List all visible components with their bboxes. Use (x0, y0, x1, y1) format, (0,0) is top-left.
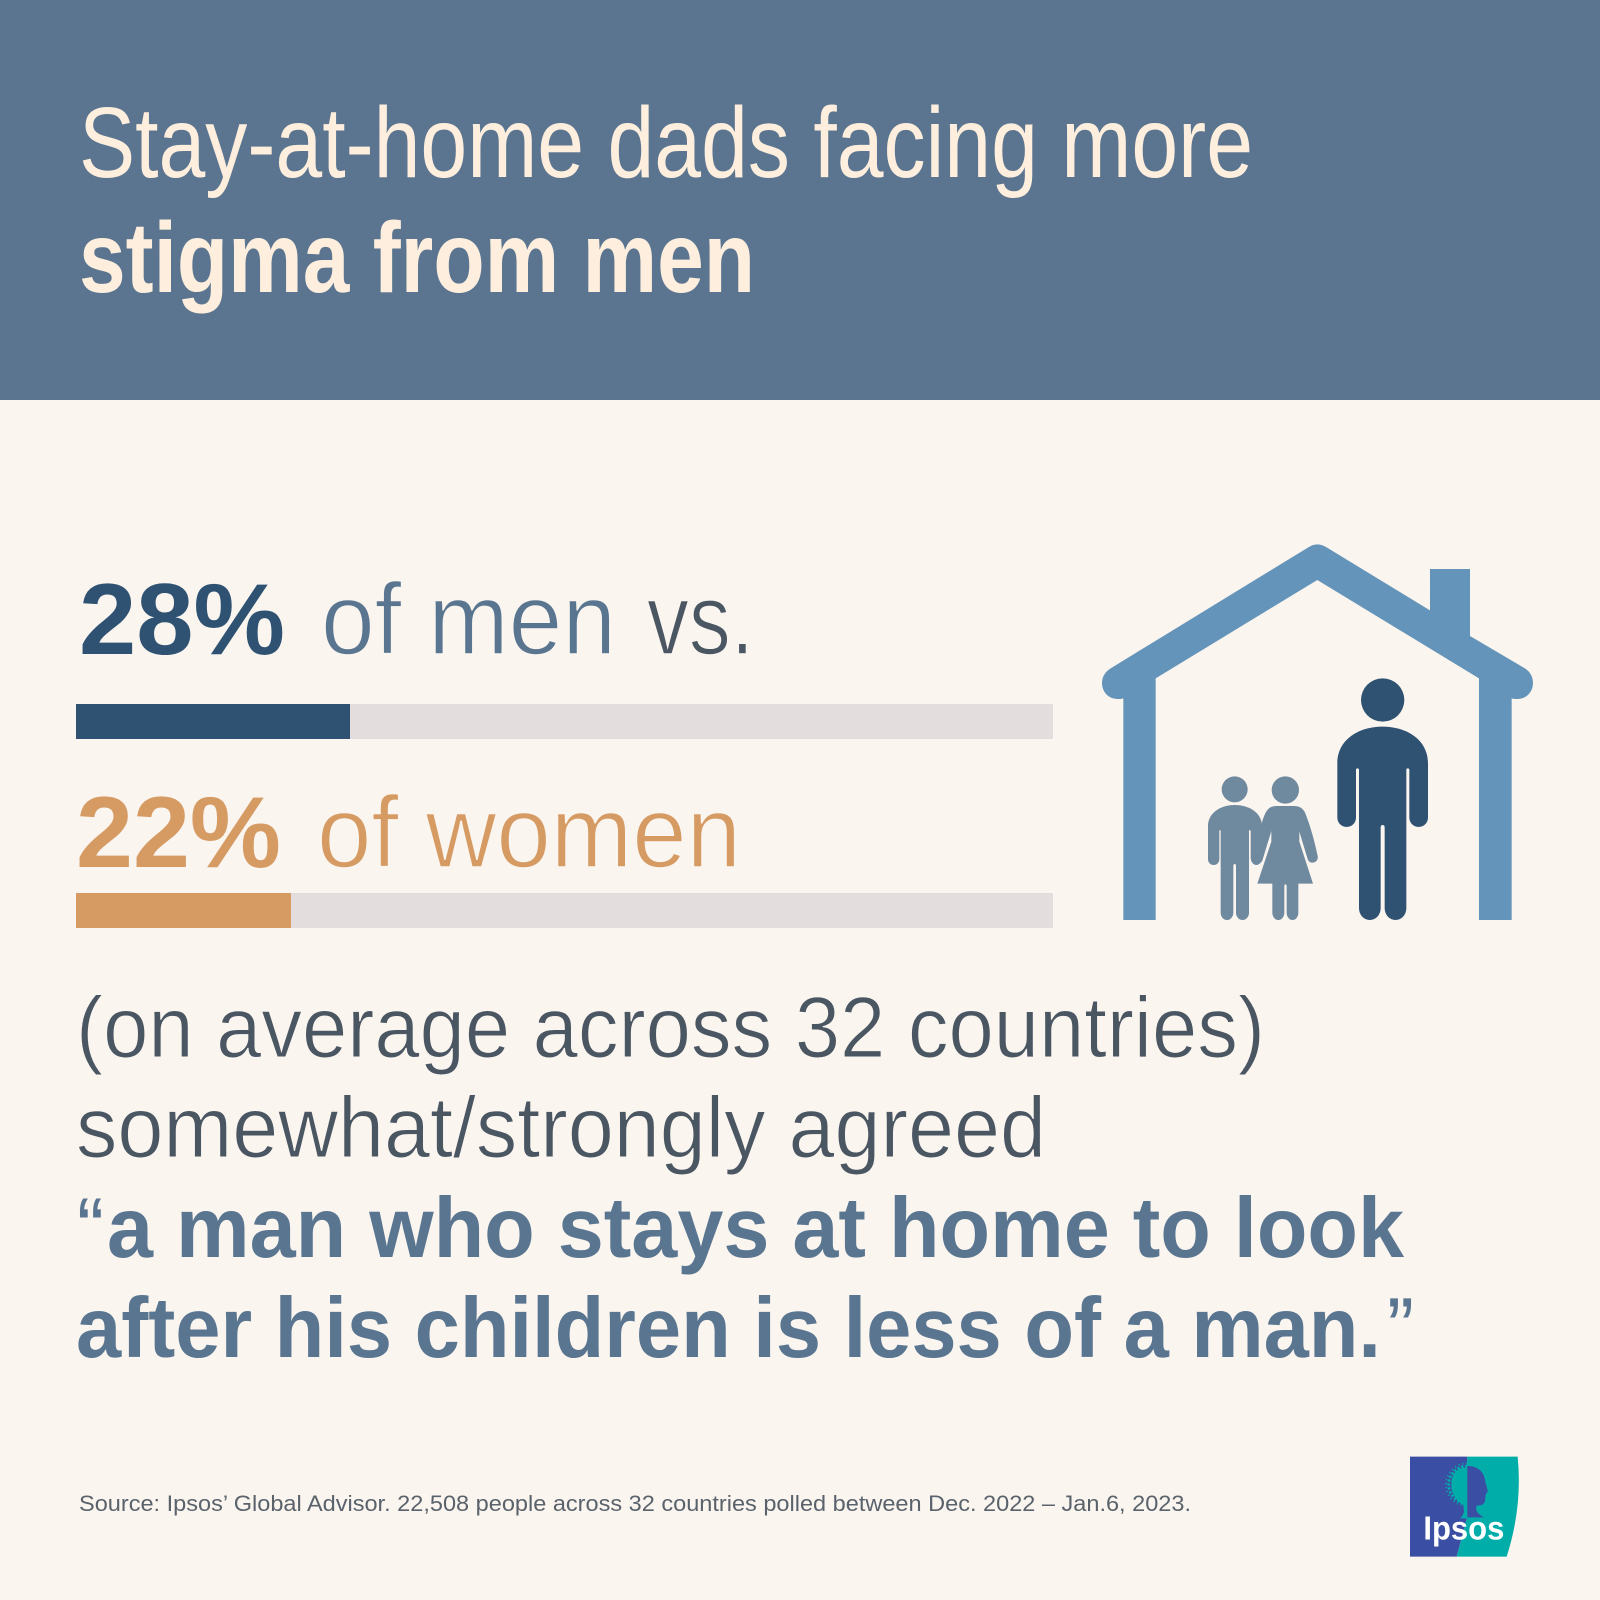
icon: house (1102, 544, 1533, 920)
quote: “ (77, 1181, 104, 1276)
quote: a man who stays at home to look (107, 1181, 1405, 1276)
text: survey description: (on average across 32 countries) (76, 980, 1265, 1076)
icon: boy (1208, 776, 1262, 920)
statistic: 28% of men: vs. (647, 564, 754, 676)
icon: house with family (1102, 544, 1533, 920)
statistic: 28% of men: of men (321, 564, 616, 676)
quote: ” (1387, 1281, 1414, 1376)
header banner (0, 0, 1600, 400)
statistic: 22% of women (76, 777, 741, 889)
statistic: 28% of men (79, 564, 754, 676)
logo: Ipsos: Ipsos (1423, 1511, 1504, 1548)
quote: after his children is less of a man. (76, 1281, 1381, 1376)
statistic: 28% of men: 28% (79, 564, 285, 676)
icon: girl (1253, 776, 1318, 920)
statistic: 22% of women: 22% (76, 777, 281, 889)
statistic: 22% of women: of women (317, 777, 741, 889)
text: survey description (76, 980, 1265, 1176)
text: survey description: somewhat/strongly agreed (76, 1080, 1046, 1176)
bar: women 22% (76, 893, 1053, 928)
quote (76, 1181, 1414, 1376)
icon: father (1337, 678, 1428, 920)
logo: Ipsos (1410, 1457, 1519, 1557)
title: stigma from men (79, 202, 755, 314)
title: Stay-at-home dads facing more (79, 87, 1253, 199)
title (79, 87, 1253, 314)
source note: Source: Ipsos’ Global Advisor. 22,508 people across 32 countries polled between Dec. 2022 – Jan.6, 2023. (79, 1491, 1191, 1516)
bar: men 28% (76, 704, 1053, 739)
